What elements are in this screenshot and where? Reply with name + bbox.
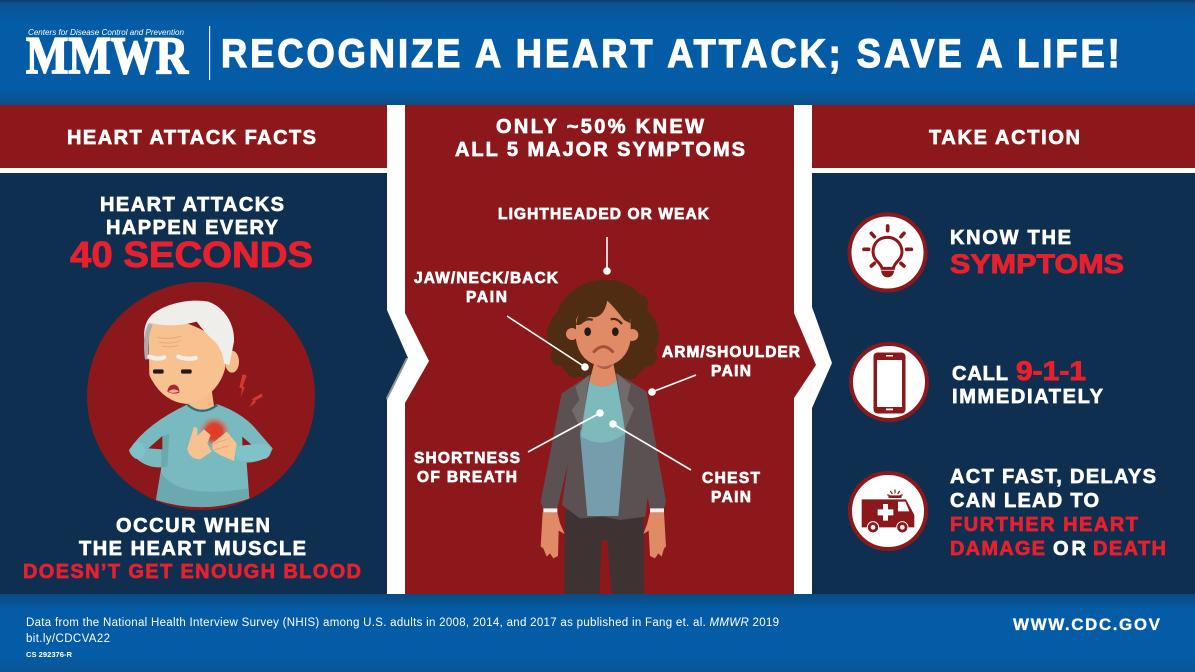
- illustration: man with chest pain: [87, 282, 315, 510]
- text block: 40 seconds: 40 SECONDS: [70, 234, 313, 275]
- text block: act fast: FURTHER HEART: [950, 514, 1138, 536]
- symptom label: jaw neck back: JAW/NECK/BACK: [414, 270, 559, 287]
- symptom label: arm shoulder: PAIN: [711, 363, 751, 380]
- text block: act fast: DAMAGE: [950, 538, 1045, 560]
- fringe: [576, 293, 631, 325]
- grey side hair: [144, 323, 153, 359]
- symptom label: jaw neck back: PAIN: [466, 289, 507, 306]
- column heading: symptoms: ONLY ~50% KNEW: [496, 116, 704, 138]
- text block: call 911: IMMEDIATELY: [952, 386, 1104, 408]
- website: WWW.CDC.GOV: [1013, 615, 1161, 634]
- text block: call 911: 9-1-1: [1016, 356, 1086, 386]
- symptom label: shortness of breath: OF BREATH: [417, 469, 517, 486]
- text block: occur when: THE HEART MUSCLE: [79, 538, 306, 560]
- text block: 40 seconds: HEART ATTACKS: [100, 194, 284, 216]
- arms: [541, 393, 575, 508]
- icon: ambulance: [850, 473, 926, 549]
- text block: know the symptoms: KNOW THE: [950, 227, 1071, 249]
- column heading: heart attack facts: HEART ATTACK FACTS: [67, 127, 316, 149]
- text block: know the symptoms: [950, 227, 1124, 279]
- column heading: symptoms: ALL 5 MAJOR SYMPTOMS: [455, 139, 745, 161]
- text block: act fast: CAN LEAD TO: [950, 490, 1099, 512]
- brows and eyes: [149, 357, 196, 359]
- symptom label: jaw neck back: [414, 270, 559, 306]
- symptom label: lightheaded: LIGHTHEADED OR WEAK: [498, 206, 710, 223]
- text block: occur when: OCCUR WHEN: [116, 515, 270, 537]
- text block: act fast: ACT FAST, DELAYS: [950, 466, 1156, 488]
- symptom label: chest pain: CHEST: [702, 470, 761, 487]
- jacket: [562, 373, 652, 520]
- shirt: [580, 381, 626, 516]
- hair: [144, 301, 234, 365]
- heart glow: [199, 416, 230, 446]
- pain sparks: [239, 374, 263, 407]
- text block: act fast: DEATH: [1093, 538, 1166, 560]
- hands: [541, 512, 565, 558]
- text block: occur when: [23, 515, 361, 583]
- symptom label: shortness of breath: SHORTNESS: [414, 450, 520, 467]
- legs: [564, 510, 644, 594]
- symptom label: shortness of breath: [414, 450, 520, 486]
- MMWR logo: MMWR: [26, 27, 189, 85]
- icon: light bulb: [850, 214, 926, 290]
- neck: [589, 360, 617, 386]
- column heading: take action: TAKE ACTION: [929, 127, 1080, 149]
- symptom label: chest pain: PAIN: [711, 489, 751, 506]
- symptom pointer lines: [507, 237, 696, 470]
- face: [576, 300, 631, 367]
- text block: act fast: OR: [1053, 538, 1087, 560]
- text block: occur when: DOESN’T GET ENOUGH BLOOD: [23, 561, 361, 583]
- illustration: woman with symptoms: [541, 280, 666, 594]
- text block: know the symptoms: SYMPTOMS: [950, 249, 1124, 279]
- cuffs: [543, 508, 664, 512]
- column heading: symptoms: [455, 116, 745, 161]
- text block: call 911: CALL: [952, 363, 1008, 385]
- eyes and brows: [584, 327, 591, 336]
- mouth: [167, 385, 179, 394]
- ears: [566, 328, 578, 340]
- text block: 40 seconds: [70, 194, 313, 275]
- text block: act fast: [950, 466, 1166, 560]
- hands: [187, 427, 212, 459]
- symptom label: arm shoulder: [662, 344, 800, 380]
- header banner: [0, 0, 1195, 105]
- sweater: [129, 404, 273, 507]
- mouth: [594, 347, 613, 352]
- face: [148, 320, 225, 404]
- ear: [225, 351, 239, 373]
- neck: [188, 390, 214, 410]
- symptom label: chest pain: [702, 470, 761, 506]
- footer banner: [0, 594, 1195, 672]
- short link: bit.ly/CDCVA22: [26, 633, 110, 645]
- publication code: CS 292376-R: [26, 652, 72, 659]
- symptom label: arm shoulder: ARM/SHOULDER: [662, 344, 800, 361]
- source text: Data from the National Health Interview Survey (NHIS) among U.S. adults in 2008, 2014, and 2017 as published in Fang et. al. MMWR 2019: [26, 617, 779, 629]
- text block: 40 seconds: HAPPEN EVERY: [106, 217, 279, 239]
- text block: call 911: [952, 356, 1104, 408]
- lapels: [572, 375, 589, 430]
- title: RECOGNIZE A HEART ATTACK; SAVE A LIFE!: [221, 33, 1120, 76]
- icon: phone: [851, 344, 927, 420]
- hair: [547, 280, 659, 379]
- CDC line: Centers for Disease Control and Prevention: [28, 27, 184, 37]
